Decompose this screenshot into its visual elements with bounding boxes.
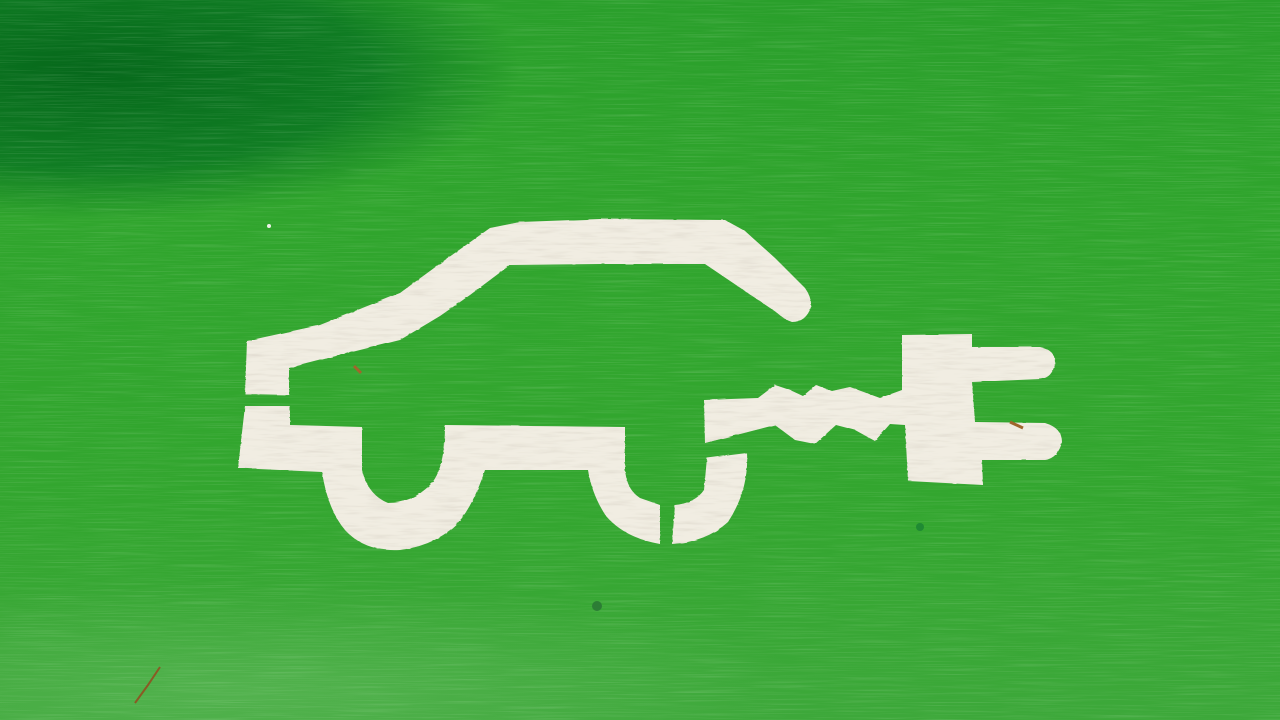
car rear wheel arch fragment [672,453,747,544]
debris: small specks on the paint [135,224,1023,703]
power cable and plug [704,334,1062,485]
car front bumper and chassis with wheel arches [238,406,660,550]
icon: electric car with plug [238,219,1062,550]
car roof and hood [245,219,811,395]
